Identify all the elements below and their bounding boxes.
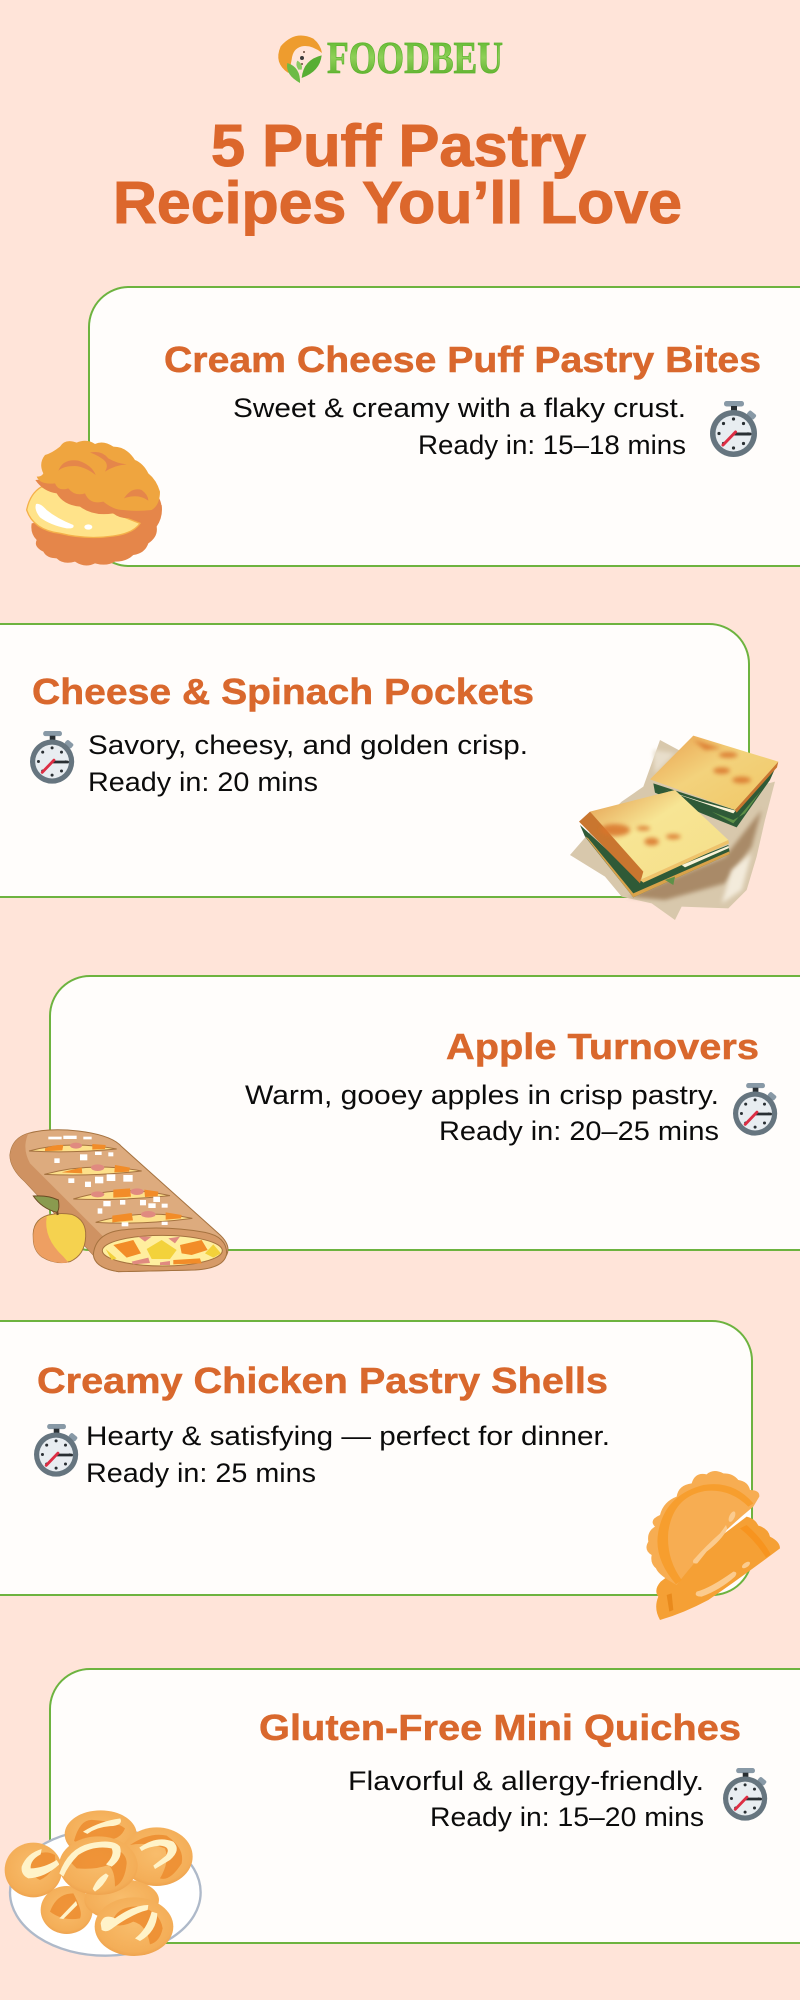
- description: [88, 730, 528, 797]
- title: Recipes You’ll Love: [113, 170, 682, 236]
- logo wordmark: FOODBEU: [327, 32, 503, 83]
- icon: stopwatch: [723, 1768, 767, 1821]
- description: [233, 393, 686, 460]
- description: Ready in: 25 mins: [86, 1458, 316, 1488]
- logo: FOODBEU: [278, 32, 503, 83]
- icon: stopwatch: [34, 1424, 78, 1477]
- card background: [50, 1669, 800, 1943]
- title: [113, 113, 682, 236]
- description: Ready in: 20 mins: [88, 767, 318, 797]
- illustration: cream puff: [27, 441, 162, 565]
- heading: Cheese & Spinach Pockets: [32, 671, 534, 712]
- illustration: pastry shells: [646, 1471, 780, 1620]
- description: Ready in: 15–18 mins: [418, 430, 686, 460]
- description: [86, 1421, 610, 1488]
- description: Flavorful & allergy-friendly.: [348, 1766, 704, 1796]
- description: [245, 1080, 719, 1146]
- panel: Gluten-Free Mini Quiches: [5, 1669, 800, 1956]
- description: Hearty & satisfying — perfect for dinner.: [86, 1421, 610, 1451]
- title: 5 Puff Pastry: [211, 113, 586, 179]
- panel: Apple Turnovers: [10, 976, 800, 1272]
- panel: Cream Cheese Puff Pastry Bites: [27, 287, 800, 566]
- description: Ready in: 15–20 mins: [430, 1802, 704, 1832]
- icon: stopwatch: [733, 1083, 777, 1136]
- icon: stopwatch: [710, 401, 757, 457]
- description: [348, 1766, 704, 1832]
- card background: [50, 976, 800, 1250]
- panel: Cheese & Spinach Pockets: [0, 624, 778, 920]
- card background: [89, 287, 800, 566]
- description: Warm, gooey apples in crisp pastry.: [245, 1080, 719, 1110]
- logo icon: sun ring and leaves: [278, 36, 322, 83]
- heading: Gluten-Free Mini Quiches: [259, 1707, 741, 1748]
- description: Sweet & creamy with a flaky crust.: [233, 393, 686, 423]
- panel: Creamy Chicken Pastry Shells: [0, 1321, 780, 1620]
- icon: stopwatch: [30, 731, 74, 784]
- heading: Cream Cheese Puff Pastry Bites: [164, 339, 761, 380]
- illustration: spinach pockets: [570, 736, 778, 920]
- illustration: apple turnover: [10, 1130, 228, 1272]
- description: Savory, cheesy, and golden crisp.: [88, 730, 528, 760]
- card background: [0, 624, 749, 897]
- description: Ready in: 20–25 mins: [439, 1116, 719, 1146]
- card background: [0, 1321, 752, 1595]
- illustration: mini quiches on plate: [5, 1810, 201, 1956]
- heading: Creamy Chicken Pastry Shells: [37, 1360, 608, 1401]
- heading: Apple Turnovers: [446, 1026, 759, 1067]
